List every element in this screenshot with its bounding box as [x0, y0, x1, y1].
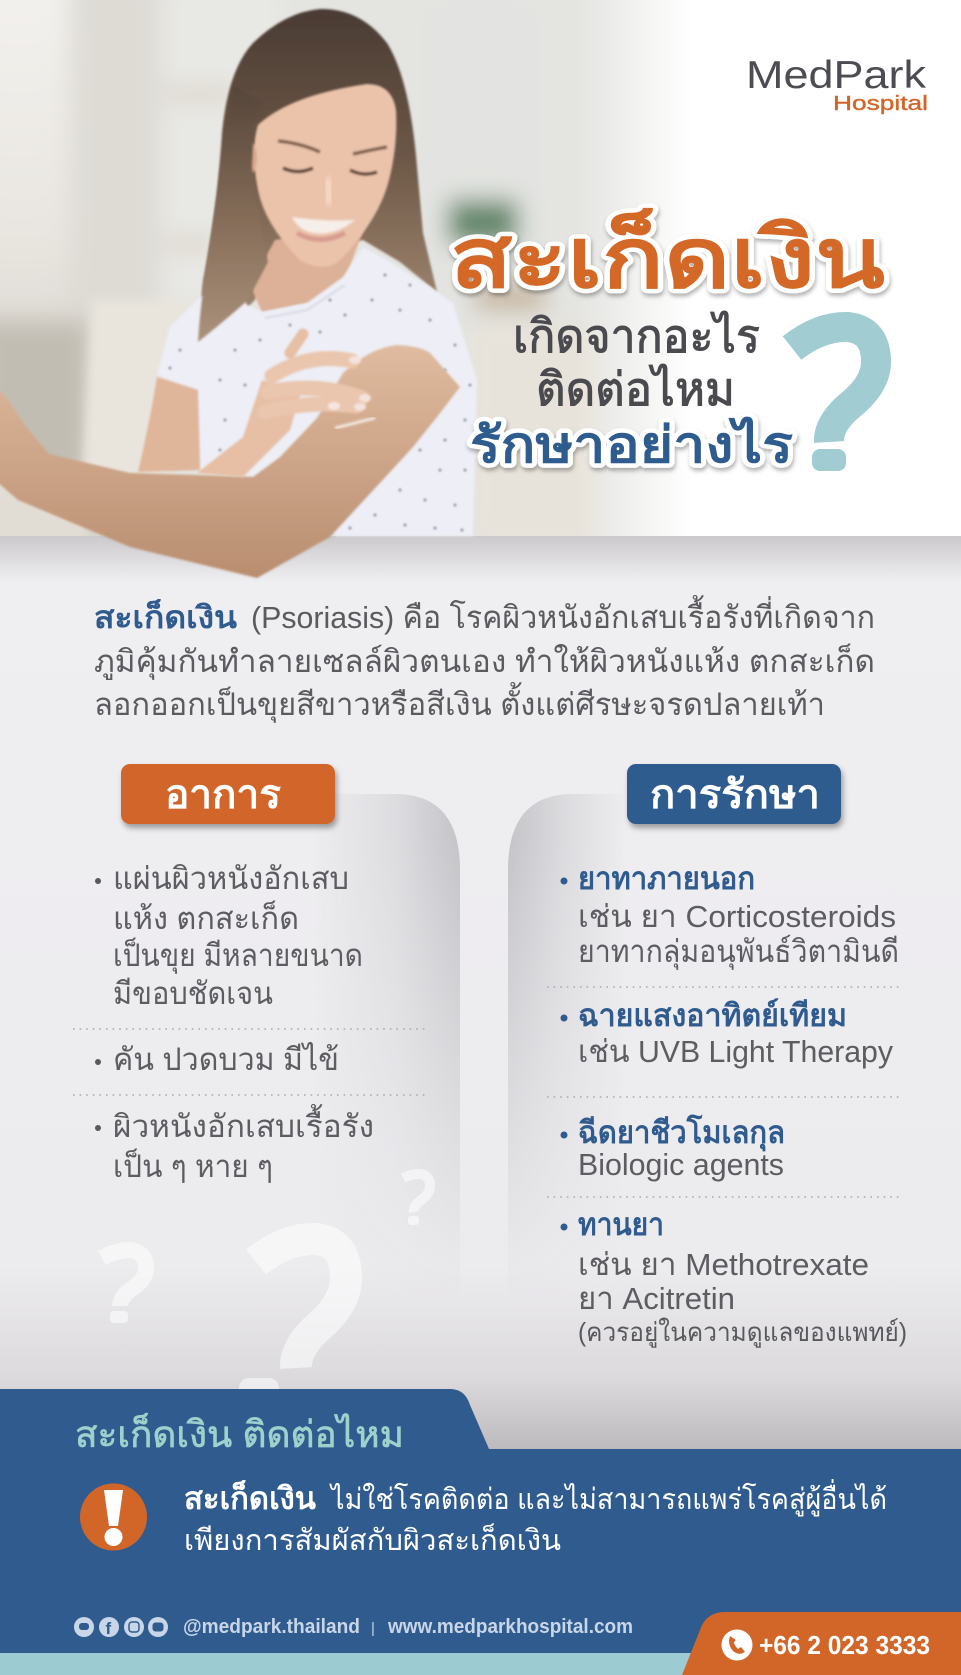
social icons: [74, 1617, 168, 1638]
treatment list: เช่น UVB Light Therapy: [578, 1034, 893, 1069]
intro paragraph: สะเก็ดเงิน: [94, 598, 237, 635]
page background: [0, 536, 961, 1675]
orange phone tab: [682, 1612, 961, 1675]
social icons: f: [106, 1619, 112, 1638]
panel: symptoms backdrop: [350, 794, 460, 1212]
social handle and website: |: [371, 1620, 375, 1637]
hair strands over left shoulder: [198, 85, 268, 342]
logo: MedPark: [746, 54, 927, 97]
title: [450, 207, 885, 473]
treatment list: [560, 861, 907, 1348]
symptoms list: แผ่นผิวหนังอักเสบ: [113, 861, 349, 896]
hair: [202, 9, 437, 340]
intro paragraph: [94, 595, 875, 724]
far arm: [138, 377, 200, 472]
decorative question marks: [102, 1174, 430, 1408]
banner message: [184, 1479, 887, 1557]
icon: teal question mark: [792, 327, 876, 471]
button: treatment heading: การรักษา: [650, 773, 820, 817]
social handle and website: @medpark.thailand: [183, 1616, 360, 1638]
social handle and website: www.medparkhospital.com: [387, 1616, 633, 1638]
cream streak: [335, 418, 375, 428]
symptoms list: [95, 861, 374, 1184]
treatment list: เช่น ยา Methotrexate: [578, 1247, 869, 1282]
symptoms list: แห้ง ตกสะเก็ด: [113, 900, 299, 936]
teal footer strip: [0, 1653, 700, 1675]
bottom blue banner: [0, 1389, 961, 1675]
phone number: +66 2 023 3333: [759, 1630, 930, 1660]
panel: treatment backdrop: [508, 794, 602, 1213]
treatment list: Biologic agents: [578, 1147, 784, 1182]
intro paragraph: ลอกออกเป็นขุยสีขาวหรือสีเงิน ตั้งแต่ศีรษะจรดปลายเท้า: [94, 682, 825, 724]
logo: Hospital: [833, 93, 928, 115]
symptoms list: เป็น ๆ หาย ๆ: [113, 1148, 273, 1184]
treatment list: ทานยา: [578, 1207, 664, 1242]
title: ติดต่อไหม: [536, 363, 735, 415]
photo: woman applying cream to her arm: [0, 0, 961, 580]
title: เกิดจากอะไร: [513, 310, 760, 362]
treatment list: ยาทากลุ่มอนุพันธ์วิตามินดี: [578, 934, 899, 971]
treatment list: ยาทาภายนอก: [578, 861, 755, 896]
symptoms list: คัน ปวดบวม มีไข้: [113, 1042, 339, 1077]
banner heading: สะเก็ดเงิน ติดต่อไหม: [75, 1411, 404, 1455]
intro paragraph: ภูมิคุ้มกันทำลายเซลล์ผิวตนเอง ทำให้ผิวหนังแห้ง ตกสะเก็ด: [94, 643, 875, 681]
button: symptoms heading: อาการ: [165, 773, 282, 817]
main forearm reaching across: [0, 345, 460, 578]
icon: phone: [722, 1630, 752, 1660]
treatment list: ฉายแสงอาทิตย์เทียม: [578, 998, 847, 1033]
banner message: เพียงการสัมผัสกับผิวสะเก็ดเงิน: [184, 1522, 561, 1557]
social handle and website: [183, 1616, 633, 1638]
neck: [250, 225, 365, 312]
banner message: ไม่ใช่โรคติดต่อ และไม่สามารถแพร่โรคสู่ผู้อื่นได้: [329, 1479, 887, 1517]
treatment list: ฉีดยาชีวโมเลกุล: [578, 1114, 785, 1152]
banner message: สะเก็ดเงิน: [184, 1479, 316, 1516]
title: รักษาอย่างไร: [470, 416, 793, 473]
symptoms list: มีขอบชัดเจน: [113, 976, 273, 1011]
treatment list: ยา Acitretin: [578, 1281, 735, 1316]
face: [245, 84, 396, 267]
intro paragraph: (Psoriasis) คือ โรคผิวหนังอักเสบเรื้อรังที่เกิดจาก: [251, 595, 875, 635]
treatment list: เช่น ยา Corticosteroids: [578, 899, 896, 934]
icon: exclamation: [80, 1484, 147, 1550]
hand with fingers: [197, 334, 371, 477]
nose highlight: [327, 178, 330, 205]
title: สะเก็ดเงิน: [450, 207, 885, 305]
symptoms list: ผิวหนังอักเสบเรื้อรัง: [113, 1104, 374, 1144]
logo: [746, 54, 928, 115]
shirt with dots: [157, 247, 477, 536]
button: treatment heading: [627, 764, 841, 824]
button: symptoms heading: [121, 764, 335, 824]
treatment list: (ควรอยู่ในความดูแลของแพทย์): [578, 1317, 907, 1348]
symptoms list: เป็นขุย มีหลายขนาด: [113, 937, 363, 975]
